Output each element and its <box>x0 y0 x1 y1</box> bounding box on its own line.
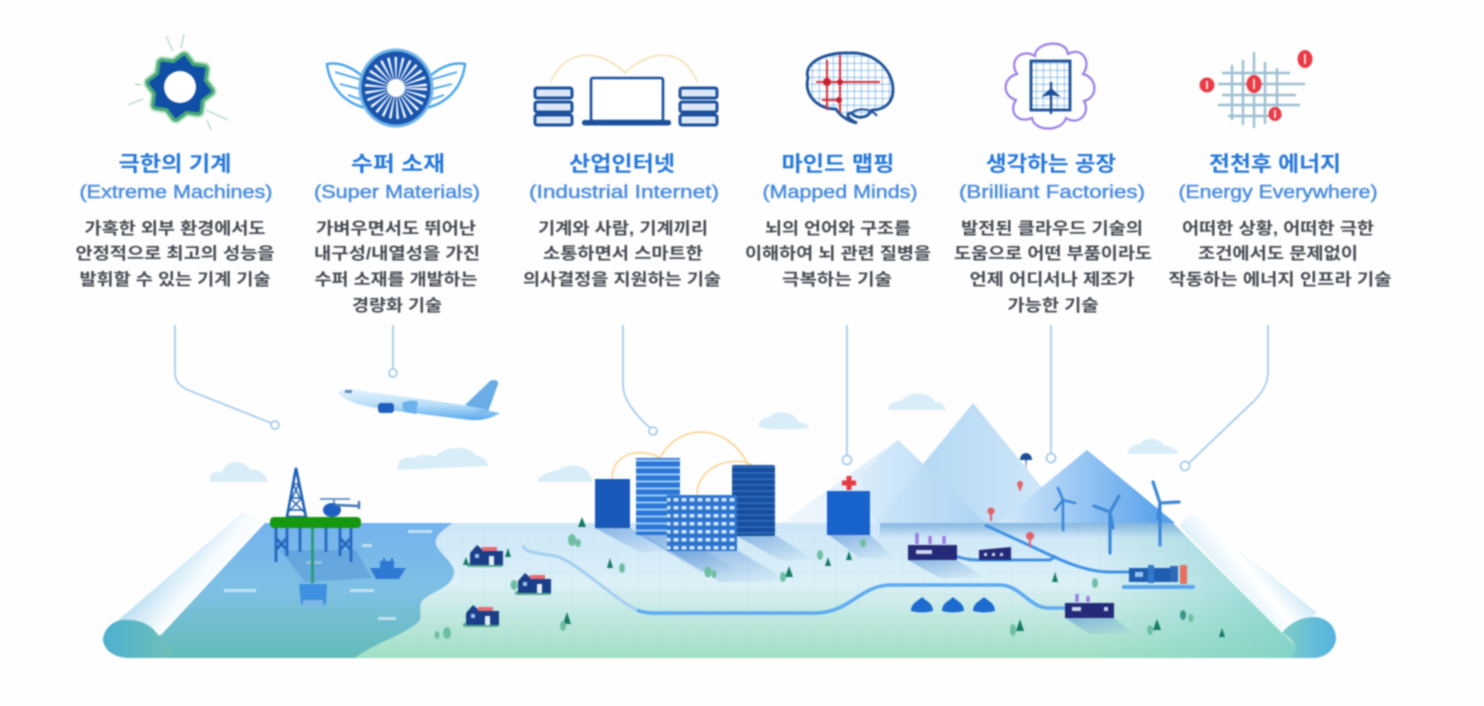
description: 가능한 기술 <box>1008 296 1098 315</box>
location pins and balloon <box>988 453 1034 547</box>
description <box>745 219 931 289</box>
description: 발전된 클라우드 기술의 <box>961 219 1143 238</box>
heading: brilliant factories: 생각하는 공장 <box>986 153 1116 176</box>
description: 수퍼 소재를 개발하는 <box>314 270 478 289</box>
description: 가혹한 외부 환경에서도 <box>84 219 266 238</box>
oil platform <box>270 468 372 606</box>
description <box>76 219 274 289</box>
description: 도움으로 어떤 부품이라도 <box>954 244 1152 263</box>
panel: extreme machines <box>76 34 274 289</box>
power lines <box>955 525 1130 572</box>
map: right roll <box>1180 515 1336 658</box>
heading: extreme machines: 극한의 기계 <box>118 153 232 176</box>
description: 뇌의 언어와 구조를 <box>765 219 911 238</box>
description: 어떠한 상황, 어떠한 극한 <box>1182 219 1374 238</box>
icon: cloud factory <box>1006 44 1094 128</box>
description: 내구성/내열성을 가진 <box>314 244 480 263</box>
description: 언제 어디서나 제조가 <box>970 270 1134 289</box>
subtitle: (Extreme Machines) <box>80 182 272 202</box>
description: 가벼우면서도 뛰어난 <box>316 219 476 238</box>
mountain base shadow <box>880 523 1188 538</box>
power turbine <box>1122 565 1195 589</box>
subtitle: (Energy Everywhere) <box>1178 182 1378 202</box>
subtitle: (Brilliant Factories) <box>959 182 1145 202</box>
wind turbines <box>1055 482 1179 553</box>
map: sea labels <box>224 530 432 620</box>
leader lines <box>175 325 1268 470</box>
heading: industrial internet: 산업인터넷 <box>569 153 675 176</box>
description: 이해하여 뇌 관련 질병을 <box>745 244 931 263</box>
map: sea <box>120 523 454 658</box>
heading: energy everywhere: 전천후 에너지 <box>1209 153 1341 176</box>
description: 발휘할 수 있는 기계 기술 <box>80 270 270 289</box>
heading: mapped minds: 마인드 맵핑 <box>782 153 894 176</box>
icon: gear <box>128 34 228 130</box>
description: 극복하는 기술 <box>782 270 892 289</box>
subtitle: (Industrial Internet) <box>529 182 719 202</box>
description: 작동하는 에너지 인프라 기술 <box>1168 270 1392 289</box>
description: 안정적으로 최고의 성능을 <box>76 244 274 263</box>
heading: super materials: 수퍼 소재 <box>351 153 445 176</box>
trees <box>434 517 1225 639</box>
map: left roll <box>103 513 262 658</box>
hospital <box>827 476 870 535</box>
mountains <box>781 403 1175 523</box>
river <box>523 545 1066 613</box>
panel: super materials <box>314 50 480 315</box>
description: 소통하면서 스마트한 <box>543 244 703 263</box>
description: 의사결정을 지원하는 기술 <box>523 270 721 289</box>
description <box>314 219 480 315</box>
buildings <box>595 458 775 551</box>
panel: industrial internet <box>523 55 721 289</box>
description <box>523 219 721 289</box>
factories <box>908 533 1114 618</box>
subtitle: (Super Materials) <box>314 182 480 202</box>
icon: brain <box>807 53 893 123</box>
panel: energy everywhere <box>1168 50 1392 289</box>
building shadows <box>595 528 1135 634</box>
subtitle: (Mapped Minds) <box>762 182 918 202</box>
map: right side tint <box>1090 523 1306 658</box>
map: land <box>130 523 1322 658</box>
description: 기계와 사람, 기계끼리 <box>538 219 708 238</box>
boat <box>370 558 406 579</box>
description: 조건에서도 문제없이 <box>1198 244 1358 263</box>
panel: brilliant factories <box>954 44 1152 315</box>
clouds <box>210 393 1178 482</box>
icon: energy grid <box>1200 50 1312 128</box>
description <box>1168 219 1392 289</box>
helicopter <box>320 499 359 517</box>
description: 경량화 기술 <box>352 296 442 315</box>
panel: mapped minds <box>745 53 931 289</box>
description <box>954 219 1152 315</box>
homes <box>463 545 995 627</box>
airplane <box>338 380 500 420</box>
icon: winged engine <box>327 50 465 126</box>
network arcs <box>612 432 752 495</box>
map: grid <box>355 523 1306 658</box>
icon: laptop and servers <box>535 55 717 126</box>
